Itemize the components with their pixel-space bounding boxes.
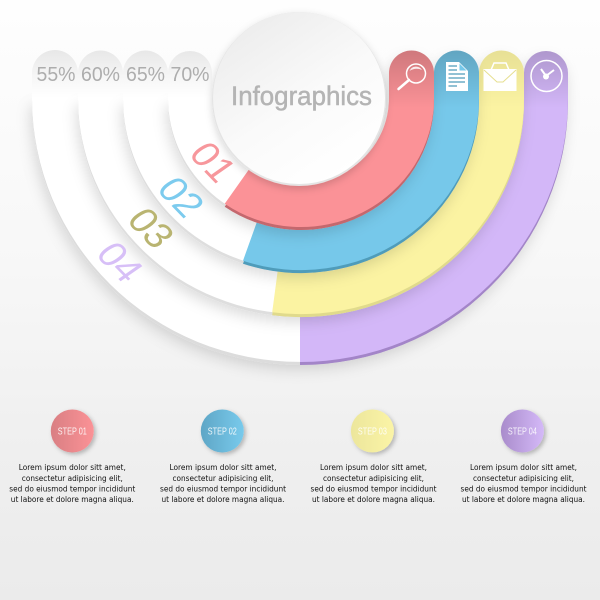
step 04	[460, 410, 586, 504]
icon: clock	[531, 60, 562, 92]
number 03: 03	[118, 201, 183, 256]
step 02: consectetur adipisicing elit,	[172, 474, 274, 483]
step 01: sed do eiusmod tempor incididunt	[9, 484, 135, 494]
step 04: ut labore et dolore magna aliqua.	[462, 495, 585, 504]
number 01: 01	[180, 135, 245, 190]
step 03: consectetur adipisicing elit,	[323, 474, 424, 483]
step 04: sed do eiusmod tempor incididunt	[460, 484, 586, 494]
percent labels	[36, 64, 210, 86]
step 03: Lorem ipsum dolor sitt amet,	[320, 463, 427, 472]
step 04: consectetur adipisicing elit,	[473, 474, 574, 483]
step 02	[160, 410, 286, 504]
step 01: STEP 01	[58, 426, 87, 438]
percent labels: 55%	[36, 64, 76, 86]
percent labels: 60%	[81, 64, 120, 86]
number 04: 04	[87, 235, 152, 290]
band 03: yellow, 60%	[78, 51, 524, 317]
band 02: blue, 65%	[123, 51, 479, 273]
number 02: 02	[148, 170, 213, 225]
step 01: consectetur adipisicing elit,	[22, 474, 123, 483]
step 01: Lorem ipsum dolor sitt amet,	[19, 463, 126, 472]
percent labels: 70%	[170, 64, 210, 86]
step 02: Lorem ipsum dolor sitt amet,	[170, 463, 276, 472]
step 01	[9, 410, 135, 504]
percent labels: 65%	[126, 64, 165, 86]
icon: document	[446, 62, 468, 91]
step 03: ut labore et dolore magna aliqua.	[312, 495, 435, 504]
band 01: red, 70%	[168, 51, 434, 230]
step 02: ut labore et dolore magna aliqua.	[162, 495, 284, 504]
band 04: purple, 55%	[32, 50, 568, 365]
icon: briefcase	[484, 63, 516, 91]
step 04: STEP 04	[508, 426, 537, 438]
step 01: ut labore et dolore magna aliqua.	[11, 495, 134, 504]
step 03	[310, 410, 436, 504]
center circle with title: Infographics	[231, 81, 372, 111]
step 03: STEP 03	[358, 426, 387, 438]
icon: magnifier	[398, 64, 426, 89]
step 02: STEP 02	[208, 426, 237, 438]
step 02: sed do eiusmod tempor incididunt	[160, 484, 286, 494]
step 04: Lorem ipsum dolor sitt amet,	[470, 463, 577, 472]
center circle with title	[212, 12, 386, 186]
step 03: sed do eiusmod tempor incididunt	[310, 484, 436, 494]
